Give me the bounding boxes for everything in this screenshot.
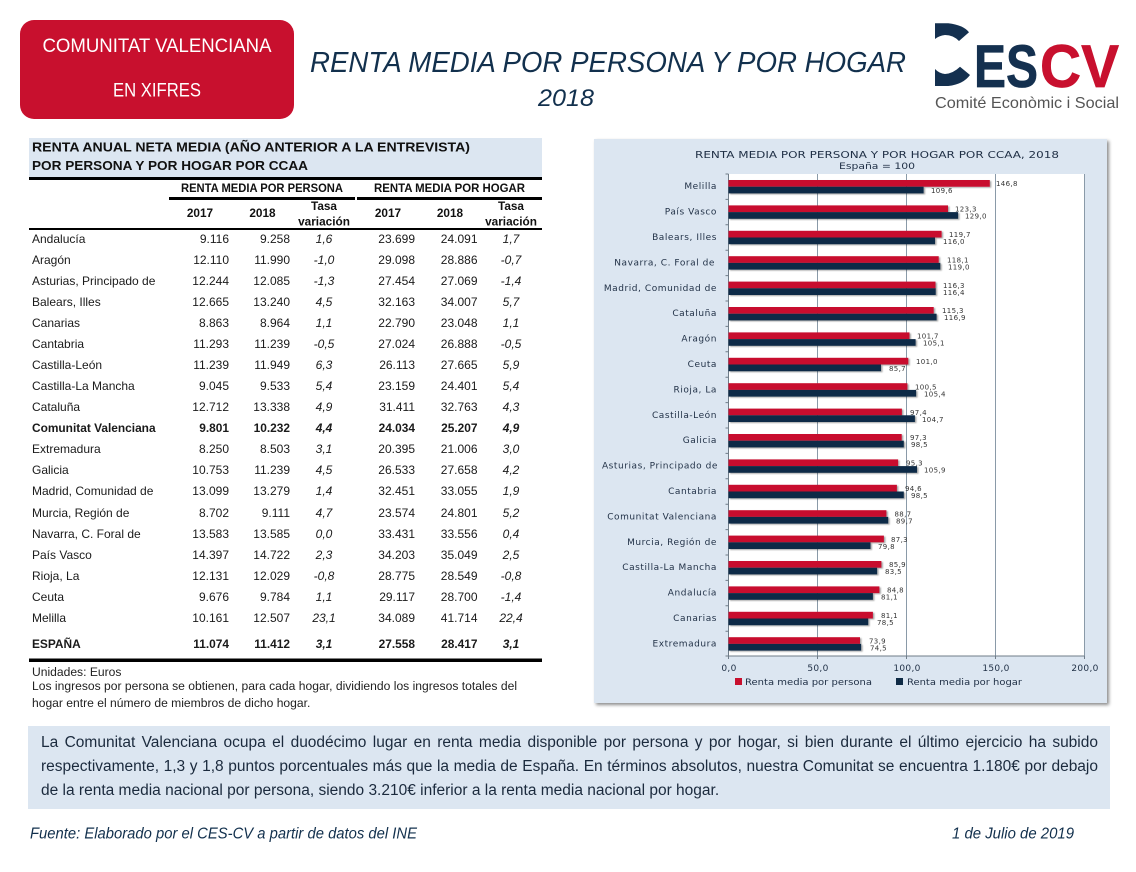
table rows: País Vasco [32, 548, 92, 562]
table rows: 27.454 [378, 274, 415, 288]
table rows: -1,4 [501, 590, 522, 604]
table rows: 10.232 [254, 421, 290, 435]
table rows: Cantabria [32, 337, 84, 351]
table rows: Madrid, Comunidad de [32, 484, 154, 498]
table title band: POR PERSONA Y POR HOGAR POR CCAA [32, 158, 309, 173]
table rows: 10.161 [192, 611, 229, 625]
x axis labels [721, 664, 1099, 674]
table rows: 28.886 [441, 253, 478, 267]
table rows: ESPAÑA [32, 636, 81, 651]
bars and labels: 116,4 [943, 289, 965, 297]
bars and labels: 104,7 [922, 416, 944, 424]
table column headers: RENTA MEDIA POR HOGAR [374, 181, 525, 195]
table rows: Comunitat Valenciana [32, 421, 156, 435]
table rows: 33.556 [441, 527, 478, 541]
table rows: 1,1 [316, 590, 332, 604]
table rows: Navarra, C. Foral de [32, 527, 141, 541]
bars and labels: 87,3 [891, 536, 908, 544]
bars and labels: 79,8 [878, 543, 895, 551]
table rows: 9.258 [260, 232, 290, 246]
table rows: 23.699 [378, 232, 415, 246]
table rows: 1,6 [316, 232, 333, 246]
text block: summary paragraph: respectivamente, 1,3 y 1,8 puntos porcentuales más que la media de España. En términos absolutos, nuestra Comunitat se encuentra 1.180€ por debajo [41, 758, 1098, 774]
table rows: 35.049 [441, 548, 478, 562]
source footer: Fuente: Elaborado por el CES-CV a partir de datos del INE [30, 826, 418, 842]
table rows: Melilla [32, 611, 66, 625]
table rows: 11.239 [254, 337, 290, 351]
bars and labels: 81,1 [881, 594, 898, 602]
bars and labels: 81,1 [881, 612, 898, 620]
table rows: 33.431 [378, 527, 415, 541]
table rows: 4,5 [316, 463, 333, 477]
table rows: Andalucía [32, 232, 86, 246]
chart title: RENTA MEDIA POR PERSONA Y POR HOGAR POR CCAA, 2018 [695, 150, 1059, 161]
table notes [32, 665, 517, 710]
table rows: 20.395 [378, 442, 415, 456]
table rows: 1,1 [316, 316, 332, 330]
table rows: 34.007 [441, 295, 478, 309]
x axis labels: 50,0 [807, 664, 829, 674]
table rows: 11.412 [254, 637, 290, 651]
table column headers: Tasa [498, 199, 524, 213]
title: 2018 [537, 85, 595, 112]
table rows: 12.665 [192, 295, 229, 309]
table rows: 4,9 [316, 400, 333, 414]
bars and labels: 94,6 [905, 485, 922, 493]
panel: bar chart renta media por CCAA [594, 139, 1107, 703]
table rows: 27.658 [441, 463, 478, 477]
table rows: 4,7 [316, 506, 334, 520]
bars and labels: 73,9 [869, 637, 886, 645]
table rows: 23.574 [378, 506, 415, 520]
table title band [29, 138, 542, 177]
table rows: 0,0 [316, 527, 333, 541]
badge: Comunitat Valenciana en xifres [20, 20, 294, 119]
text block: summary paragraph [28, 726, 1110, 809]
table rows: 27.024 [378, 337, 415, 351]
table rows: 26.113 [379, 358, 415, 372]
bars and labels: Asturias, Principado de [602, 462, 718, 472]
table rows: 1,1 [503, 316, 519, 330]
table rows: -1,0 [314, 253, 335, 267]
bars and labels: Galicia [683, 436, 717, 446]
table rows: Extremadura [32, 442, 101, 456]
bars and labels: Cantabria [668, 487, 717, 497]
table rows: 27.558 [379, 637, 415, 651]
logo: CES-CV: ES [974, 33, 1038, 100]
table rows: 8.863 [199, 316, 229, 330]
table rows: 11.074 [193, 637, 229, 651]
table rows: 5,9 [503, 358, 520, 372]
table rows: 1,7 [503, 232, 521, 246]
badge: Comunitat Valenciana en xifres: EN XIFRES [113, 80, 201, 102]
table rows: 22.790 [378, 316, 415, 330]
table column headers: 2017 [375, 206, 402, 220]
table rows: 22,4 [498, 611, 523, 625]
table rows: 3,1 [503, 637, 519, 651]
table rows: 25.207 [441, 421, 478, 435]
table rows: 3,1 [316, 442, 332, 456]
table rows: Ceuta [32, 590, 64, 604]
bars and labels: 116,3 [943, 282, 965, 290]
table rows: 28.549 [441, 569, 478, 583]
table rows: -0,8 [501, 569, 522, 583]
table rows: 12.712 [192, 400, 229, 414]
table rows: 5,4 [503, 379, 520, 393]
bars and labels: 116,9 [944, 314, 966, 322]
table rows: 9.676 [199, 590, 229, 604]
table column headers: 2017 [187, 206, 214, 220]
bars and labels: 88,7 [894, 510, 912, 518]
table rows: 2,3 [315, 548, 333, 562]
table rows: 9.045 [199, 379, 229, 393]
bars and labels: 119,7 [949, 231, 971, 239]
table rows: 11.239 [193, 358, 229, 372]
table rows: Galicia [32, 463, 69, 477]
table notes: hogar entre el número de miembros de dicho hogar. [32, 696, 310, 710]
bars and labels: 74,5 [870, 644, 887, 652]
table column headers: variación [298, 214, 350, 228]
table rows: 4,2 [503, 463, 520, 477]
table rows: 13.585 [253, 527, 290, 541]
table rows: 29.098 [378, 253, 415, 267]
bars and labels: Extremadura [652, 639, 717, 649]
table rows: 8.250 [199, 442, 229, 456]
legend: Renta media por hogar [907, 678, 1022, 688]
table rows: 8.964 [260, 316, 290, 330]
table rows: 4,4 [315, 421, 333, 435]
bars and labels: País Vasco [665, 208, 717, 218]
table rows: 1,9 [503, 484, 520, 498]
table rows: 5,7 [503, 295, 521, 309]
table rows: Canarias [32, 316, 80, 330]
text block: summary paragraph: de la renta media nacional por persona, siendo 3.210€ inferior a la renta media nacional por hogar. [41, 782, 719, 798]
table rows: Murcia, Región de [32, 506, 130, 520]
table rows: 12.029 [253, 569, 290, 583]
table rows: 26.533 [378, 463, 415, 477]
legend [735, 678, 1022, 688]
bars and labels: 116,0 [943, 238, 965, 246]
table rows: 12.244 [192, 274, 229, 288]
bars and labels: 78,5 [877, 619, 894, 627]
bars and labels: 101,7 [917, 333, 939, 341]
table rows: 5,4 [316, 379, 333, 393]
table rows: 10.753 [192, 463, 229, 477]
table rows: 27.069 [441, 274, 478, 288]
bars and labels: 146,8 [996, 180, 1018, 188]
table rows: Castilla-León [32, 358, 102, 372]
table rows: 26.888 [441, 337, 478, 351]
table rows: -0,5 [501, 337, 522, 351]
table rows: 9.784 [260, 590, 290, 604]
logo: CES-CV: CV [1040, 33, 1119, 100]
table rows: 9.116 [200, 232, 229, 246]
table rows: 12.085 [253, 274, 290, 288]
bars and labels: 97,3 [910, 434, 927, 442]
bars and labels: 85,9 [889, 561, 906, 569]
bars and labels: 100,5 [915, 383, 937, 391]
bars and labels: Navarra, C. Foral de [614, 258, 715, 268]
table rows: 13.583 [192, 527, 229, 541]
table rows: Castilla-La Mancha [32, 379, 135, 393]
bars and labels: 97,4 [910, 409, 927, 417]
table rows: 12.110 [193, 253, 229, 267]
x axis labels: 100,0 [893, 664, 921, 674]
table column headers: 2018 [249, 206, 276, 220]
table rows: 13.279 [253, 484, 290, 498]
table rows: 11.949 [254, 358, 290, 372]
bars and labels: 98,5 [911, 441, 928, 449]
bars and labels: 118,1 [947, 256, 969, 264]
title [310, 47, 906, 112]
bars and labels: Rioja, La [674, 385, 717, 395]
bars and labels [602, 180, 1018, 652]
bars and labels: 101,0 [916, 358, 938, 366]
x axis labels: 200,0 [1071, 664, 1099, 674]
table rows: 28.417 [441, 637, 478, 651]
table rows: 21.006 [441, 442, 478, 456]
x axis labels: 150,0 [982, 664, 1010, 674]
table rows: 13.099 [192, 484, 229, 498]
table rows: 28.775 [378, 569, 415, 583]
table rows [32, 232, 523, 651]
badge: Comunitat Valenciana en xifres: COMUNITAT VALENCIANA [42, 36, 272, 57]
bars and labels: 109,6 [931, 187, 953, 195]
table rows: 32.163 [378, 295, 415, 309]
logo: CES-CV: Comité Econòmic i Social [935, 95, 1119, 112]
table rows: Asturias, Principado de [32, 274, 156, 288]
table rows: 32.451 [378, 484, 415, 498]
table rows: -0,7 [501, 253, 523, 267]
table rows: 6,3 [316, 358, 333, 372]
chart title [695, 150, 1059, 172]
bars and labels: Castilla-León [652, 410, 717, 421]
bars and labels: Madrid, Comunidad de [604, 284, 717, 294]
bars and labels: Andalucía [668, 589, 717, 599]
table rows: 24.091 [441, 232, 478, 246]
table rows: 4,5 [316, 295, 333, 309]
bars and labels: Balears, Illes [652, 233, 717, 243]
table rows: 32.763 [441, 400, 478, 414]
table notes: Unidades: Euros [32, 665, 121, 679]
table rows: 12.507 [253, 611, 290, 625]
table column headers: Tasa [311, 199, 337, 213]
table rows: 28.700 [441, 590, 478, 604]
table rows: 4,9 [502, 421, 520, 435]
table column headers: RENTA MEDIA POR PERSONA [181, 181, 343, 195]
table rows: 27.665 [441, 358, 478, 372]
x axis labels: 0,0 [721, 664, 737, 674]
table rows: Rioja, La [32, 569, 80, 583]
table rows: 3,0 [503, 442, 520, 456]
bars and labels: 123,3 [955, 206, 977, 214]
bars and labels: Cataluña [672, 309, 717, 319]
bars and labels: 95,3 [906, 460, 923, 468]
table rows: -0,8 [314, 569, 335, 583]
table rows: 2,5 [502, 548, 520, 562]
table rows: 23,1 [311, 611, 336, 625]
legend: Renta media por persona [745, 678, 872, 688]
table rows: 13.240 [253, 295, 290, 309]
table rows: 9.801 [199, 421, 229, 435]
text block: summary paragraph: La Comunitat Valenciana ocupa el duodécimo lugar en renta media disponible por persona y por hogar, si bien durante el último ejercicio ha subido [41, 734, 1098, 751]
bars and labels: 105,4 [924, 390, 946, 398]
table rows: 11.239 [254, 463, 290, 477]
table rows: -1,3 [314, 274, 335, 288]
table title band: RENTA ANUAL NETA MEDIA (AÑO ANTERIOR A LA ENTREVISTA) [32, 140, 470, 154]
table rows: 24.034 [379, 421, 415, 435]
table rows: 13.338 [253, 400, 290, 414]
table rows: 1,4 [316, 484, 333, 498]
table rows: 24.401 [441, 379, 478, 393]
title: RENTA MEDIA POR PERSONA Y POR HOGAR [310, 47, 906, 79]
table rows: 33.055 [441, 484, 478, 498]
table rows: 4,3 [503, 400, 520, 414]
table rows: 11.990 [254, 253, 290, 267]
chart title: España = 100 [839, 161, 915, 172]
bars and labels: 89,7 [896, 517, 913, 525]
table rows: 14.722 [253, 548, 290, 562]
table rows: 41.714 [441, 611, 478, 625]
bars and labels: Murcia, Región de [627, 537, 717, 548]
table rows: Balears, Illes [32, 295, 101, 309]
table rows: -0,5 [314, 337, 335, 351]
bars and labels: Melilla [684, 182, 717, 192]
source footer [30, 826, 1074, 842]
table rows: 12.131 [192, 569, 229, 583]
bars and labels: 85,7 [889, 365, 906, 373]
bars and labels: 84,8 [887, 587, 904, 595]
bars and labels: 115,3 [942, 307, 964, 315]
bars and labels: Comunitat Valenciana [607, 512, 717, 522]
bars and labels: Aragón [681, 334, 717, 345]
table rows: 29.117 [379, 590, 415, 604]
table rows: Aragón [32, 253, 71, 267]
table notes: Los ingresos por persona se obtienen, para cada hogar, dividiendo los ingresos totales del [32, 679, 517, 693]
table rows: 8.702 [199, 506, 229, 520]
plot area and axes [726, 174, 1084, 659]
table rows: 0,4 [503, 527, 520, 541]
bars and labels: 83,5 [885, 568, 902, 576]
bars and labels: 105,1 [923, 340, 945, 348]
table column headers [181, 181, 537, 228]
table rows: 23.159 [378, 379, 415, 393]
table rows: 3,1 [316, 637, 332, 651]
bars and labels: Canarias [673, 614, 717, 624]
table column headers: 2018 [437, 206, 464, 220]
source footer: 1 de Julio de 2019 [952, 826, 1074, 842]
table rows: 24.801 [441, 506, 478, 520]
table: renta anual neta media [29, 138, 542, 710]
table rows: 5,2 [503, 506, 520, 520]
table rows: 34.203 [378, 548, 415, 562]
table rows: 11.293 [193, 337, 229, 351]
table rows: -1,4 [501, 274, 522, 288]
bars and labels: 98,5 [911, 492, 928, 500]
bars and labels: Ceuta [688, 360, 717, 370]
bars and labels: 129,0 [965, 213, 987, 221]
table rows: 9.533 [260, 379, 290, 393]
table rows: 34.089 [378, 611, 415, 625]
table rows: 23.048 [441, 316, 478, 330]
table column headers: variación [485, 214, 537, 228]
bars and labels: 105,9 [924, 467, 946, 475]
table rows: 9.111 [262, 506, 290, 520]
table rows: 14.397 [192, 548, 229, 562]
table rows: 8.503 [260, 442, 290, 456]
bars and labels: 119,0 [948, 263, 970, 271]
bars and labels: Castilla-La Mancha [622, 563, 717, 573]
table rows: Cataluña [32, 400, 80, 414]
logo: CES-CV [935, 23, 1119, 112]
table rows: 31.411 [379, 400, 415, 414]
